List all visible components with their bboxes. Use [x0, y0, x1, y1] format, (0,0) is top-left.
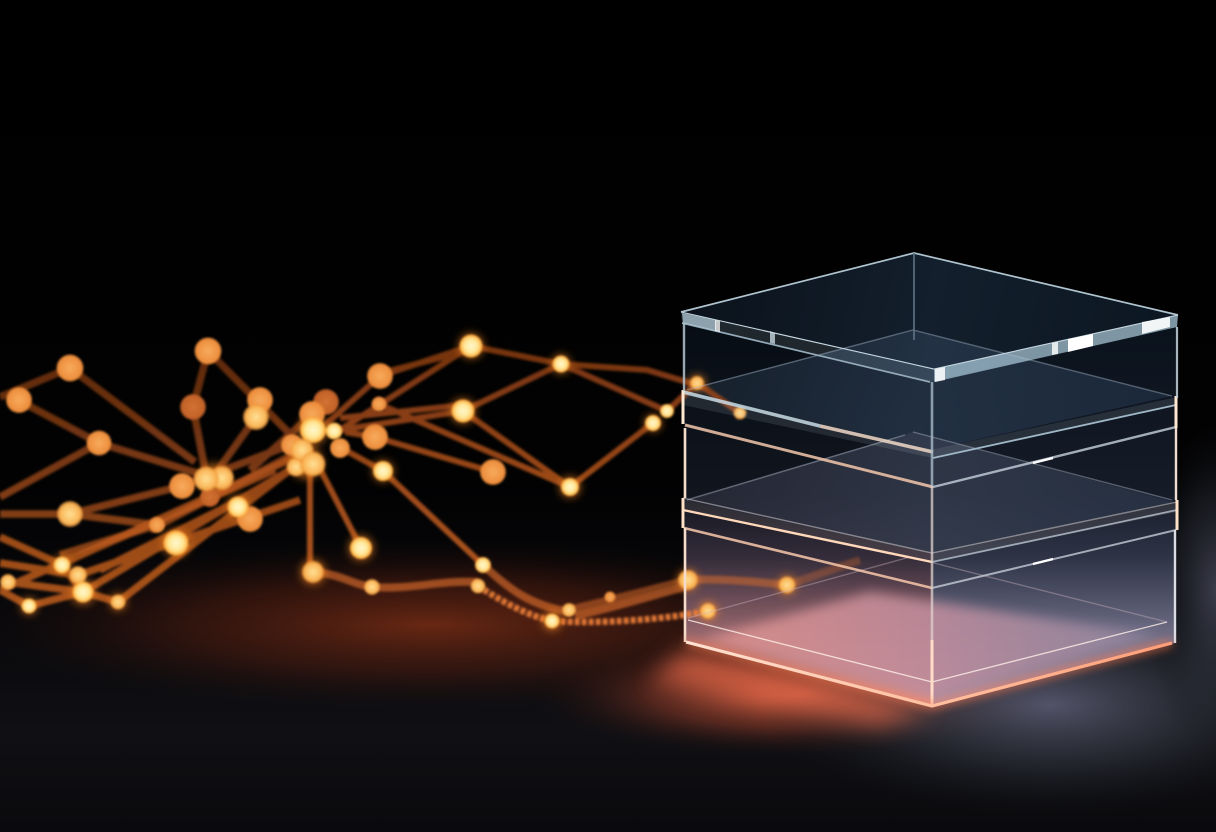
floor glow: orange under network	[0, 540, 890, 710]
floor glow: orange reflection along cube edge	[650, 648, 932, 725]
cube: third layer edges	[683, 432, 1177, 588]
cube: pink floor panel	[700, 592, 1160, 698]
network: bright glowing nodes	[22, 334, 746, 628]
floor glow: cool light right of cube	[760, 595, 1216, 815]
cube: second layer edges	[683, 330, 1177, 487]
cube: glass edges	[681, 253, 1178, 706]
cube body: glass fills	[681, 253, 1178, 706]
floor glow: cool light behind cube	[1146, 420, 1216, 760]
cube: second layer plate	[683, 330, 1172, 450]
cube: glowing bottom edge	[686, 642, 1172, 706]
cube: third layer plate	[683, 432, 1174, 553]
cube: left front wall	[683, 323, 932, 706]
floor glow: red in front of cube	[530, 633, 1070, 757]
cube: floor outlines	[688, 557, 1167, 682]
cube: top face	[681, 253, 1178, 369]
cube: top plate edges	[681, 253, 1178, 382]
network: connecting lines	[0, 346, 860, 622]
cube: vertical edges	[684, 323, 1177, 706]
network: soft orange nodes	[0, 338, 796, 602]
cube: right front wall	[932, 327, 1177, 706]
network: node halos	[21, 334, 796, 630]
